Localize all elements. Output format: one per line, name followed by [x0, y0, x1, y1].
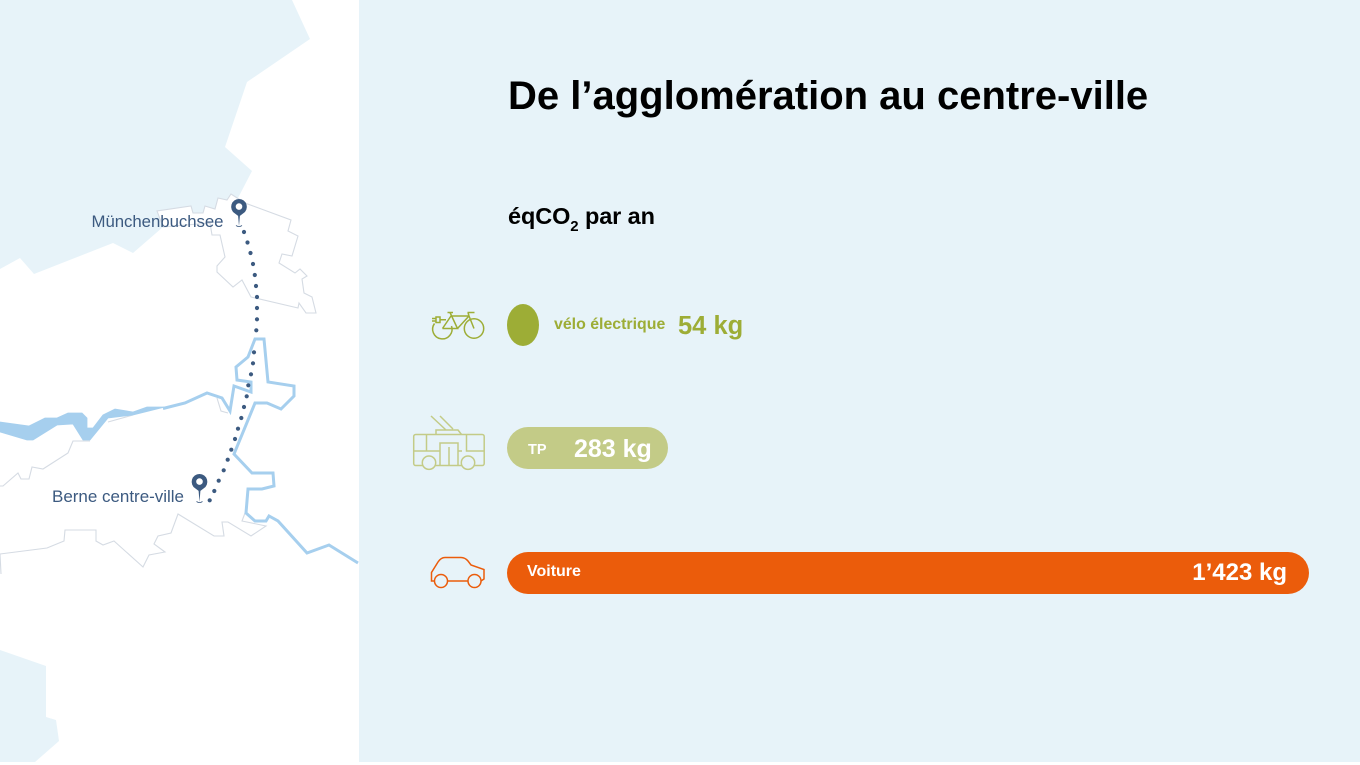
label: TP: TP [528, 442, 547, 458]
subtitle: éqCO [508, 203, 570, 229]
route: dotted line between the two locations [208, 230, 259, 502]
icon: trolleybus [412, 416, 485, 470]
bar: vélo électrique [507, 304, 539, 346]
label: Münchenbuchsee: Münchenbuchsee [92, 212, 224, 231]
map: municipality boundaries [0, 194, 316, 574]
map: southern shaded region [0, 650, 59, 762]
chart row: vélo électrique [507, 304, 743, 346]
icon: car [430, 556, 485, 588]
subtitle: 2 [570, 218, 579, 235]
title: De l’agglomération au centre-ville [508, 74, 1148, 118]
subtitle: par an [579, 203, 655, 229]
label: Voiture: Voiture [527, 563, 581, 580]
label: Berne centre-ville: Berne centre-ville [52, 487, 184, 506]
bar: TP [507, 427, 668, 469]
bar: Voiture [507, 552, 1309, 594]
pin: Berne centre-ville [192, 474, 207, 503]
value: 1’423 kg: 1’423 kg [1192, 559, 1287, 586]
label: vélo électrique: vélo électrique [554, 316, 665, 333]
icon: electric bike [432, 312, 484, 340]
map: northern shaded region [0, 0, 310, 274]
panel: comparison background [359, 0, 1360, 762]
pin: Münchenbuchsee [231, 199, 247, 227]
value: 54 kg: 54 kg [678, 312, 743, 340]
map: river Aare [0, 339, 358, 563]
value: 283 kg: 283 kg [574, 435, 652, 463]
subtitle [508, 203, 655, 235]
map panel [0, 0, 359, 762]
